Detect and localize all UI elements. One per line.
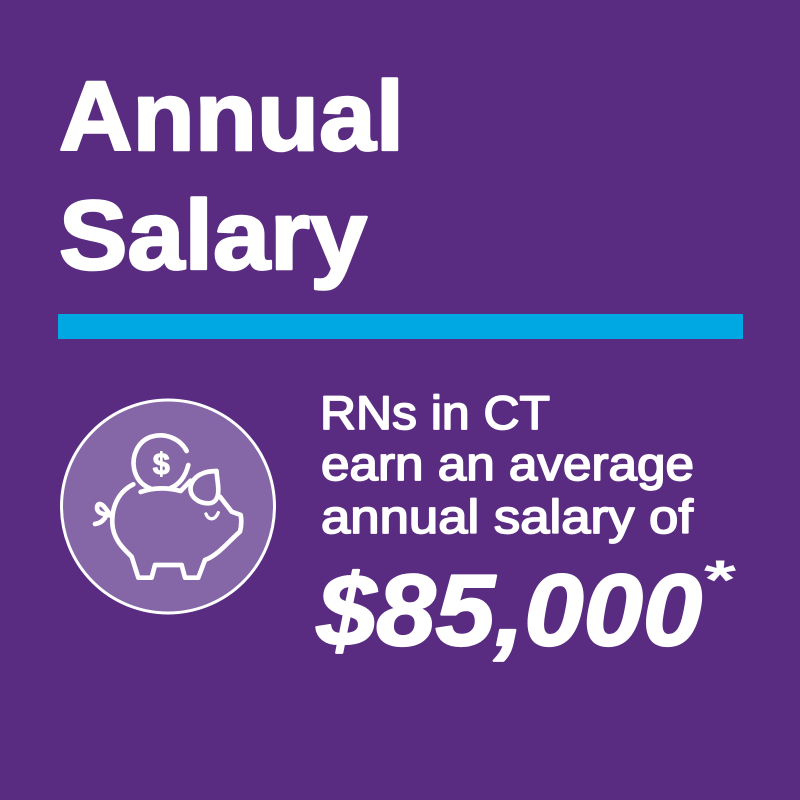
blue divider bar xyxy=(58,314,743,339)
title: Salary xyxy=(59,180,367,290)
description text: annual salary of xyxy=(321,490,694,543)
salary figure: * xyxy=(704,548,736,611)
icon: piggy bank with coin: $ xyxy=(153,447,170,481)
icon: piggy bank with coin xyxy=(62,400,274,613)
description text xyxy=(320,386,694,543)
description text: RNs in CT xyxy=(320,386,550,439)
description text: earn an average xyxy=(321,437,694,490)
title xyxy=(59,61,404,290)
salary figure: $85,000 xyxy=(316,555,702,667)
title: Annual xyxy=(59,61,404,171)
